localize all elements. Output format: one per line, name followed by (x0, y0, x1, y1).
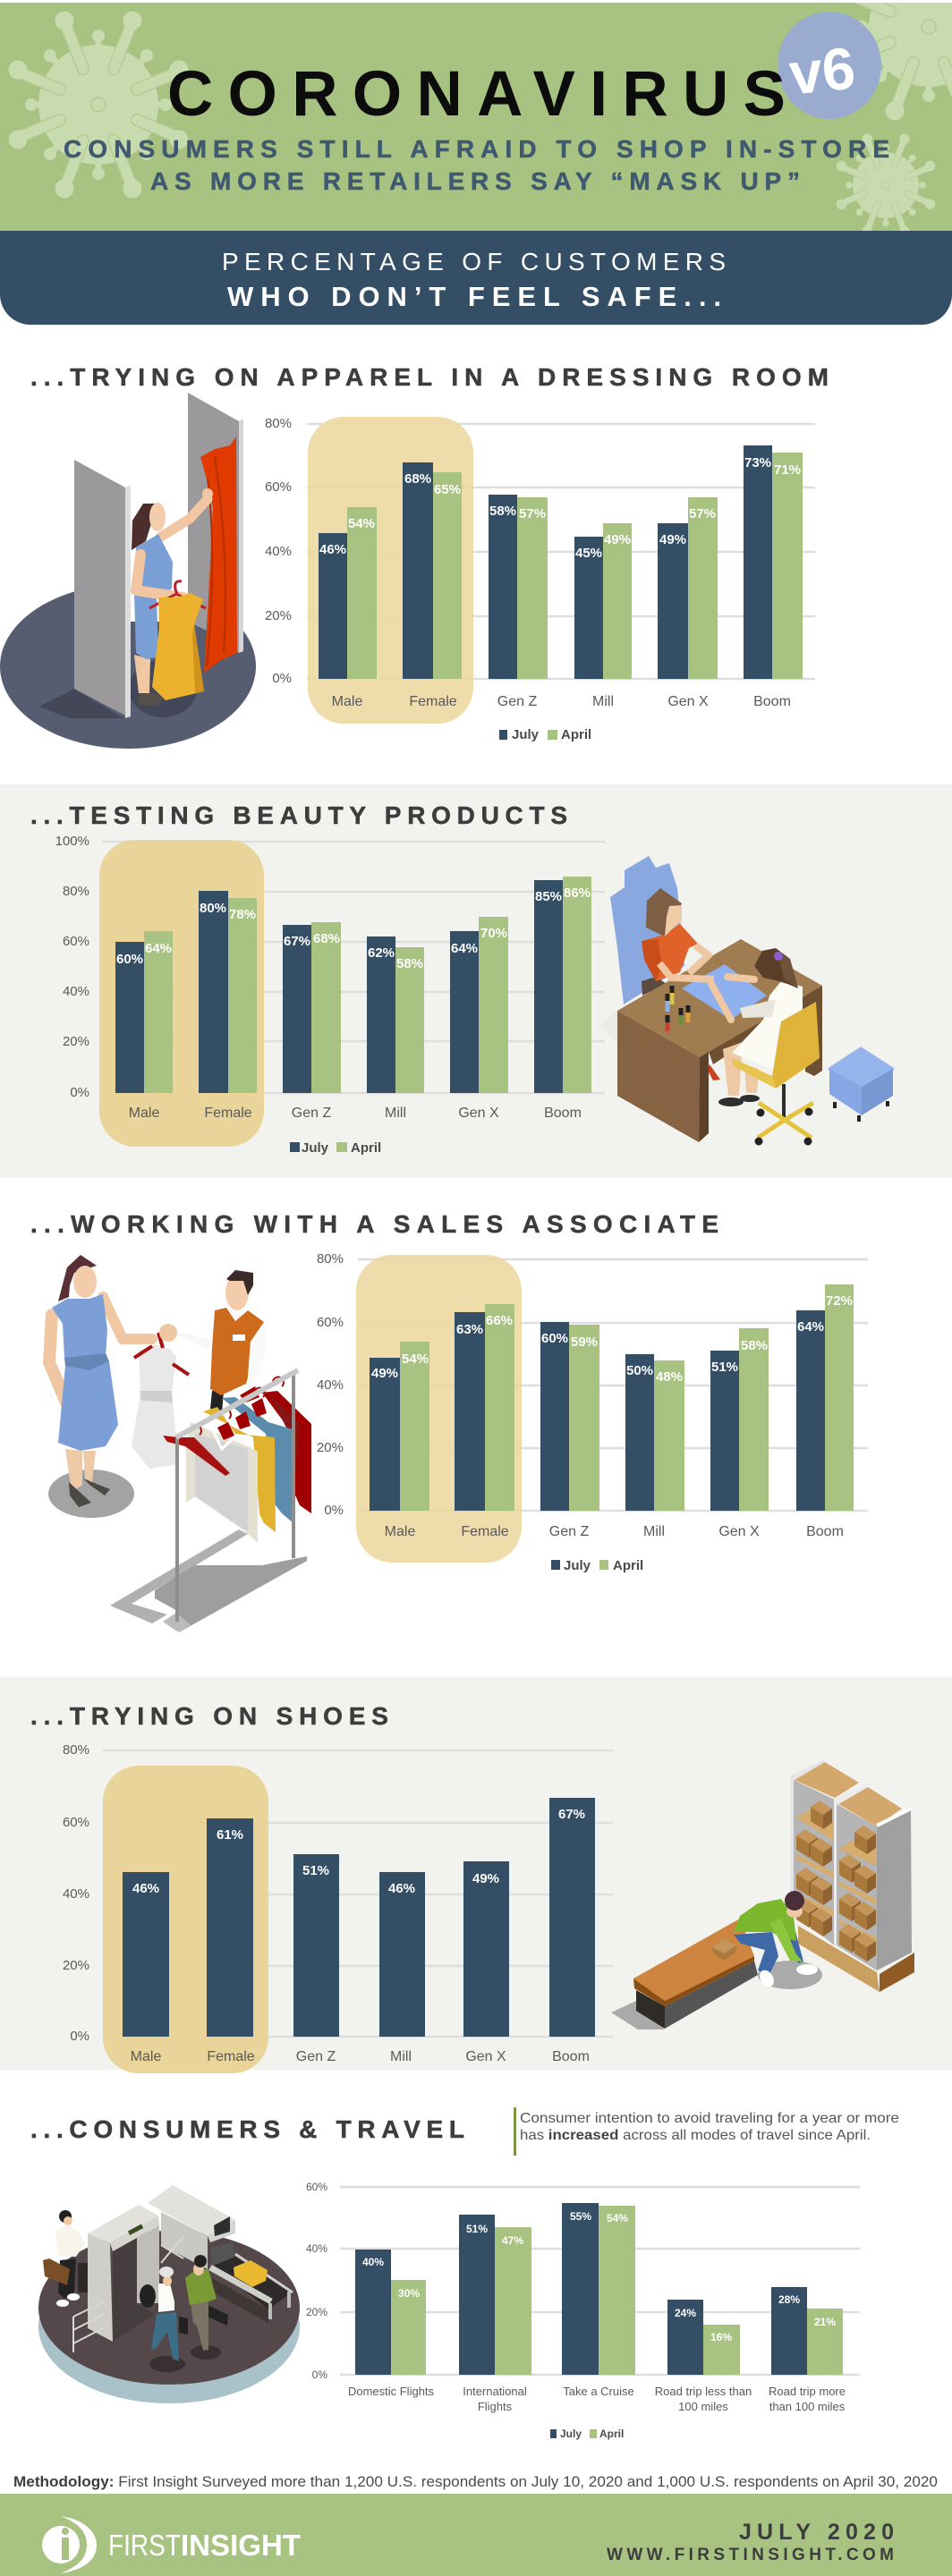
bar chart: travel: Flights (478, 2400, 513, 2413)
bar chart: dressing room: 73% (744, 455, 771, 470)
bar chart: beauty products: 80% (63, 884, 89, 899)
bar chart: shoes: 60% (63, 1815, 89, 1830)
methodology note: Methodology: First Insight Surveyed more than 1,200 U.S. respondents on July 10, 2020 and 1,000 U.S. respondents on April 30, 2020 (13, 2473, 938, 2490)
bar chart: shoes: 61% (217, 1827, 243, 1843)
heading: ...CONSUMERS & TRAVEL (30, 2115, 464, 2143)
bar chart: sales associate: 48% (656, 1369, 683, 1385)
bar chart: sales associate: 63% (456, 1322, 483, 1337)
bar chart: travel: than 100 miles (769, 2400, 846, 2413)
bar chart: travel: 55% (570, 2210, 591, 2223)
illustration: man trying shoes at shelf (611, 1759, 914, 2029)
bar chart: sales associate: 58% (741, 1338, 768, 1353)
bar chart: dressing room: 45% (575, 546, 602, 561)
bar chart: sales associate: Female (461, 1524, 509, 1539)
bar chart: beauty products: Gen Z (292, 1106, 331, 1121)
bar chart: travel: 28% (778, 2293, 800, 2306)
bar chart: travel: Domestic Flights (348, 2385, 435, 2398)
bar chart: sales associate: 40% (317, 1377, 344, 1393)
legend: July (302, 1140, 329, 1156)
bar chart: sales associate: 50% (626, 1363, 653, 1378)
bar chart: beauty products: 78% (229, 907, 256, 922)
subtitle: AS MORE RETAILERS SAY “MASK UP” (150, 167, 800, 195)
callout: has increased across all modes of travel since April. (520, 2128, 871, 2143)
bar chart: travel: 51% (466, 2223, 488, 2235)
bar chart: shoes: 67% (558, 1807, 585, 1822)
title: CORONAVIRUS (167, 59, 786, 130)
website: WWW.FIRSTINSIGHT.COM (607, 2546, 894, 2564)
bar chart: sales associate (317, 1251, 868, 1573)
bar chart: beauty products: 60% (63, 934, 89, 949)
bar chart: shoes: 20% (63, 1958, 89, 1973)
decorative viruses (9, 0, 952, 236)
bar chart: dressing room: 40% (265, 544, 292, 559)
bar chart: beauty products (55, 834, 605, 1156)
legend: July (564, 1558, 591, 1573)
illustration: manicure desk (599, 856, 893, 1145)
legend: July (512, 727, 540, 742)
bar chart: travel: 54% (607, 2212, 628, 2224)
bar chart: sales associate: 60% (317, 1315, 344, 1330)
navy banner (0, 231, 952, 325)
legend: April (351, 1140, 381, 1156)
bar chart: beauty products: 67% (284, 934, 310, 949)
illustration: airport security (38, 2185, 300, 2403)
bar chart: sales associate: Gen Z (549, 1524, 589, 1539)
section: sales associate (30, 1210, 868, 1632)
bar chart: sales associate: Male (385, 1524, 415, 1539)
bar chart: beauty products: 58% (396, 956, 423, 971)
bar chart: sales associate: 54% (402, 1352, 429, 1367)
bar chart: shoes: 40% (63, 1886, 89, 1902)
bar chart: dressing room: 46% (319, 542, 346, 557)
bar chart: shoes: Female (207, 2049, 255, 2064)
bar chart: dressing room: 58% (489, 504, 516, 519)
legend (550, 2428, 624, 2440)
bar chart: shoes: Gen X (465, 2049, 506, 2064)
legend: April (561, 727, 591, 742)
bar chart: sales associate: 66% (486, 1313, 513, 1328)
logo: FIRST (108, 2529, 181, 2562)
bar chart: travel: 16% (710, 2331, 732, 2343)
bar chart: dressing room: 54% (348, 516, 375, 531)
bar chart: beauty products: 68% (313, 931, 340, 946)
bar chart: beauty products: 85% (535, 889, 562, 904)
logo: INSIGHT (181, 2529, 301, 2562)
bar chart: dressing room: 57% (519, 506, 546, 521)
bar chart: beauty products: Mill (385, 1106, 406, 1121)
callout: Consumer intention to avoid traveling for a year or more (520, 2111, 899, 2126)
bar chart: beauty products: 80% (200, 901, 226, 916)
bar chart: shoes: Male (131, 2049, 161, 2064)
bar chart: shoes: Mill (390, 2049, 412, 2064)
bar chart: travel: Road trip more (769, 2385, 846, 2398)
bar chart: beauty products: Female (204, 1106, 252, 1121)
header banner (0, 0, 952, 236)
bar chart: dressing room: 49% (604, 532, 631, 547)
legend (551, 1558, 643, 1573)
bar chart: sales associate: 60% (541, 1331, 568, 1346)
bar chart: beauty products: Male (129, 1106, 159, 1121)
bar chart: dressing room: 68% (404, 471, 431, 487)
bar chart: sales associate: Boom (806, 1524, 844, 1539)
version badge (778, 12, 881, 119)
bar chart: travel: 24% (675, 2307, 696, 2319)
bar chart: shoes: 46% (132, 1881, 159, 1896)
subtitle (64, 135, 889, 195)
banner text line 2: WHO DON’T FEEL SAFE... (227, 281, 721, 312)
bar chart: travel: 21% (814, 2316, 836, 2328)
bar chart: travel: 100 miles (678, 2400, 728, 2413)
bar chart: sales associate: 49% (371, 1366, 398, 1381)
bar chart: dressing room: 0% (272, 671, 292, 686)
bar chart: beauty products: 40% (63, 984, 89, 999)
bar chart: shoes: Gen Z (296, 2049, 336, 2064)
bar chart: dressing room: Boom (753, 694, 791, 709)
bar chart: travel: 40% (362, 2256, 384, 2268)
bar chart: dressing room: Gen X (667, 694, 709, 709)
bar chart: beauty products: 62% (368, 945, 395, 961)
bar chart: shoes: 49% (472, 1871, 499, 1886)
bar chart: travel: 20% (306, 2306, 327, 2318)
bar chart: beauty products: Gen X (458, 1106, 499, 1121)
bar chart: travel: 60% (306, 2181, 327, 2193)
bar chart: dressing room: 20% (265, 608, 292, 623)
legend: July (560, 2428, 582, 2440)
bar chart: beauty products: 64% (451, 941, 478, 956)
bar chart: beauty products: 70% (480, 926, 507, 941)
bar chart: travel: 47% (502, 2234, 523, 2247)
bar chart: dressing room (265, 416, 815, 742)
legend: April (613, 1558, 643, 1573)
bar chart: sales associate: 51% (711, 1360, 738, 1375)
bar chart: travel: Take a Cruise (563, 2385, 634, 2398)
callout (514, 2107, 899, 2156)
illustration: shoppers at clothing rack (48, 1255, 311, 1632)
bar chart: travel (306, 2181, 860, 2440)
bar chart: travel: 40% (306, 2242, 327, 2255)
bar chart: beauty products: 0% (70, 1085, 89, 1100)
bar chart: shoes: 0% (70, 2029, 89, 2044)
bar chart: beauty products: Boom (544, 1106, 582, 1121)
bar chart: shoes: Boom (552, 2049, 590, 2064)
bar chart: dressing room: 65% (434, 482, 461, 497)
subtitle: CONSUMERS STILL AFRAID TO SHOP IN-STORE (64, 135, 889, 163)
bar chart: beauty products: 20% (63, 1034, 89, 1049)
bar chart: beauty products: 64% (145, 941, 172, 956)
bar chart: travel: International (463, 2385, 527, 2398)
bar chart: sales associate: 80% (317, 1251, 344, 1267)
heading: ...WORKING WITH A SALES ASSOCIATE (30, 1210, 718, 1238)
illustration: woman in dressing room (0, 393, 256, 749)
bar chart: dressing room: Mill (592, 694, 614, 709)
bar chart: sales associate: 0% (324, 1503, 344, 1518)
logo (42, 2516, 301, 2573)
bar chart: sales associate: 20% (317, 1440, 344, 1455)
bar chart: dressing room: Gen Z (497, 694, 537, 709)
section: beauty products (0, 784, 952, 1178)
bar chart: travel: 0% (312, 2368, 327, 2381)
section: shoes (0, 1677, 952, 2073)
bar chart: sales associate: 64% (797, 1319, 824, 1335)
bar chart: sales associate: Gen X (718, 1524, 760, 1539)
legend: April (599, 2428, 624, 2440)
bar chart: travel: Road trip less than (655, 2385, 752, 2398)
bar chart: beauty products: 60% (116, 952, 143, 967)
section: dressing room (0, 363, 829, 749)
bar chart: dressing room: 71% (774, 462, 801, 478)
bar chart: dressing room: 49% (659, 532, 686, 547)
bar chart: dressing room: 60% (265, 479, 292, 495)
legend (499, 727, 591, 742)
bar chart: dressing room: 80% (265, 416, 292, 431)
bar chart: dressing room: 57% (689, 506, 716, 521)
bar chart: dressing room: Female (409, 694, 457, 709)
heading: ...TRYING ON SHOES (30, 1702, 388, 1730)
bar chart: shoes (63, 1742, 613, 2073)
bar chart: sales associate: Mill (643, 1524, 665, 1539)
heading: ...TESTING BEAUTY PRODUCTS (30, 801, 567, 829)
date: JULY 2020 (739, 2520, 894, 2545)
version badge: v6 (786, 34, 858, 107)
section: travel (30, 2107, 899, 2440)
bar chart: shoes: 51% (302, 1863, 329, 1878)
banner text line 1: PERCENTAGE OF CUSTOMERS (222, 248, 726, 275)
bar chart: travel: 30% (398, 2287, 420, 2300)
bar chart: beauty products: 86% (564, 886, 591, 901)
footer (0, 2494, 952, 2576)
bar chart: dressing room: Male (332, 694, 362, 709)
bar chart: shoes: 46% (388, 1881, 415, 1896)
heading: ...TRYING ON APPAREL IN A DRESSING ROOM (30, 363, 829, 391)
legend (290, 1140, 381, 1156)
bar chart: sales associate: 72% (826, 1293, 853, 1309)
bar chart: shoes: 80% (63, 1742, 89, 1758)
bar chart: beauty products: 100% (55, 834, 89, 849)
bar chart: sales associate: 59% (571, 1335, 598, 1350)
